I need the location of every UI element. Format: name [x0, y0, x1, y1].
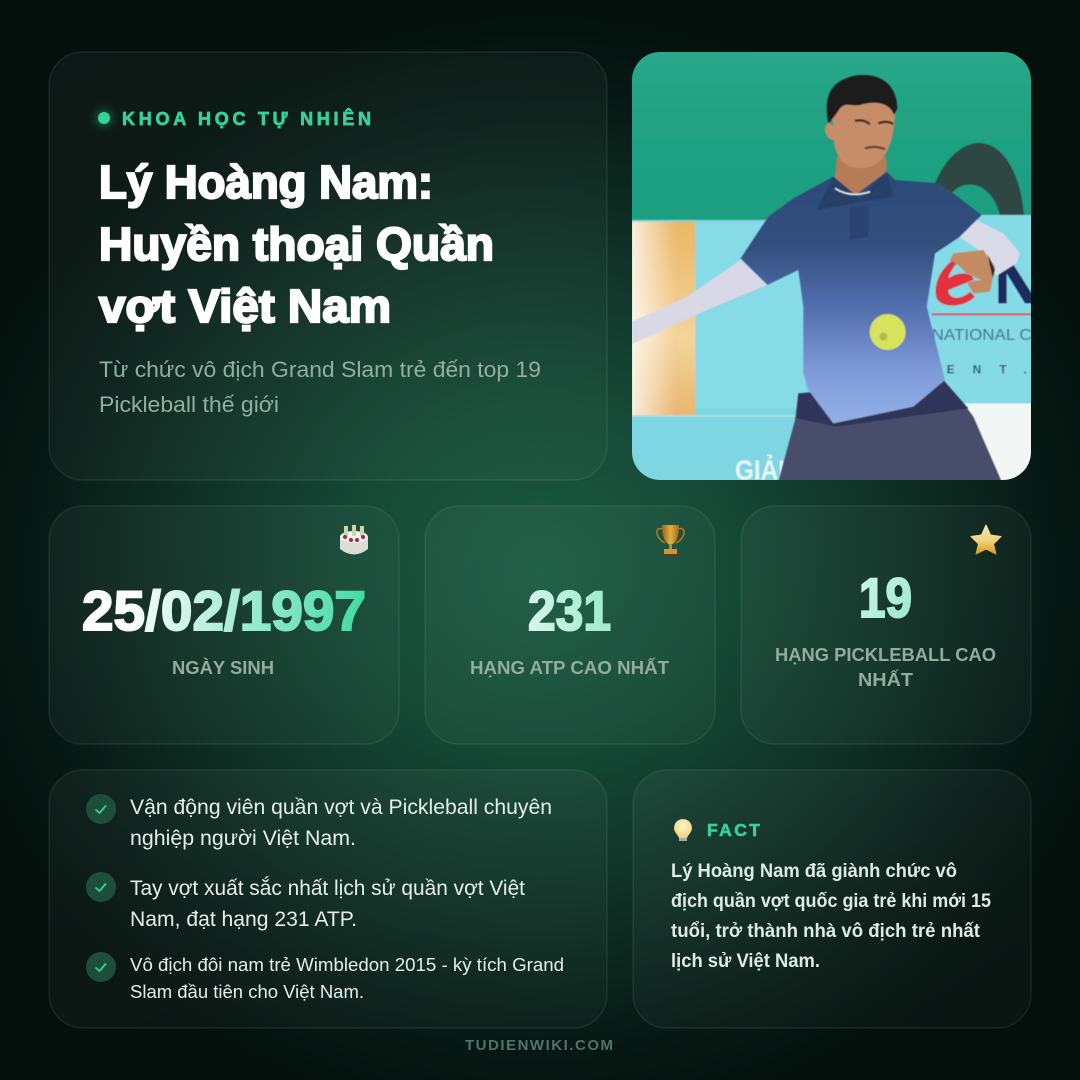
- icon: star: [971, 525, 1001, 554]
- bullet 3: Vô địch đôi nam trẻ Wimbledon 2015 - kỳ tích Grand: [130, 955, 564, 975]
- face details: [855, 120, 893, 124]
- green wall: [630, 50, 1033, 223]
- title: vợt Việt Nam: [99, 280, 391, 332]
- panel: stat pickleball rank: [741, 506, 1031, 744]
- stat label: HẠNG PICKLEBALL CAO: [775, 645, 996, 665]
- dark arch: [927, 143, 1024, 215]
- orange column: [632, 222, 695, 415]
- right forearm sleeve: [960, 215, 1020, 276]
- fact body: lịch sử Việt Nam.: [671, 951, 820, 972]
- stat value: 25/02/1997: [82, 579, 366, 642]
- bullet 1: Vận động viên quần vợt và Pickleball chuyên: [130, 796, 552, 819]
- sponsor logo: [936, 253, 975, 306]
- photo: tennis player: [630, 50, 1035, 485]
- icon: light bulb: [674, 819, 692, 841]
- ball: [870, 314, 906, 350]
- fact body: [671, 861, 991, 972]
- panel: key points: [49, 770, 607, 1028]
- stat value: 231: [528, 579, 611, 642]
- hair: [827, 75, 897, 123]
- fact body: tuổi, trở thành nhà vô địch trẻ nhất: [671, 921, 981, 942]
- footer: site name: TUDIENWIKI.COM: [465, 1037, 613, 1054]
- stat label: NGÀY SINH: [172, 657, 274, 678]
- stat label: [775, 645, 996, 690]
- icon: birthday cake: [340, 525, 368, 554]
- title: Huyền thoại Quần: [99, 218, 494, 270]
- subtitle: Từ chức vô địch Grand Slam trẻ đến top 19: [99, 357, 541, 382]
- panel: fact: [633, 770, 1031, 1028]
- fact body: Lý Hoàng Nam đã giành chức vô: [671, 861, 957, 882]
- title: Lý Hoàng Nam:: [99, 156, 433, 208]
- eyebrow: category label: KHOA HỌC TỰ NHIÊN: [122, 108, 371, 129]
- subtitle: Pickleball thế giới: [99, 392, 279, 417]
- subtitle: [99, 357, 541, 417]
- bullet 2: Tay vợt xuất sắc nhất lịch sử quần vợt Việt: [130, 877, 525, 900]
- bullet 3: Slam đầu tiên cho Việt Nam.: [130, 982, 364, 1002]
- fact body: địch quần vợt quốc gia trẻ khi mới 15: [671, 891, 991, 912]
- bullet 2: Nam, đạt hạng 231 ATP.: [130, 908, 357, 931]
- fact heading: FACT: [707, 820, 760, 840]
- panel: stat ATP rank: [425, 506, 715, 744]
- icon: trophy: [657, 525, 684, 556]
- bullet 1: nghiệp người Việt Nam.: [130, 827, 356, 850]
- stat label: HẠNG ATP CAO NHẤT: [470, 657, 669, 678]
- photo: tennis player: GIẢI: [735, 453, 785, 485]
- panel: stat birth date: [49, 506, 399, 744]
- shirt: [741, 172, 982, 423]
- head: [825, 77, 895, 168]
- stat value: 19: [859, 566, 912, 629]
- shorts: [778, 394, 1002, 480]
- neck: [833, 157, 887, 200]
- banner: [630, 220, 1033, 483]
- photo: tennis player: NATIONAL C: [932, 327, 1032, 344]
- left arm: [632, 260, 767, 344]
- bullet 3: [86, 952, 564, 1002]
- bullet 2: [86, 872, 525, 931]
- panel: title card: [49, 52, 607, 480]
- stat label: NHẤT: [858, 669, 913, 690]
- hand: [950, 250, 995, 293]
- photo: tennis player: ENT.: [947, 362, 1027, 376]
- bullet 1: [86, 794, 552, 850]
- title: [99, 156, 494, 332]
